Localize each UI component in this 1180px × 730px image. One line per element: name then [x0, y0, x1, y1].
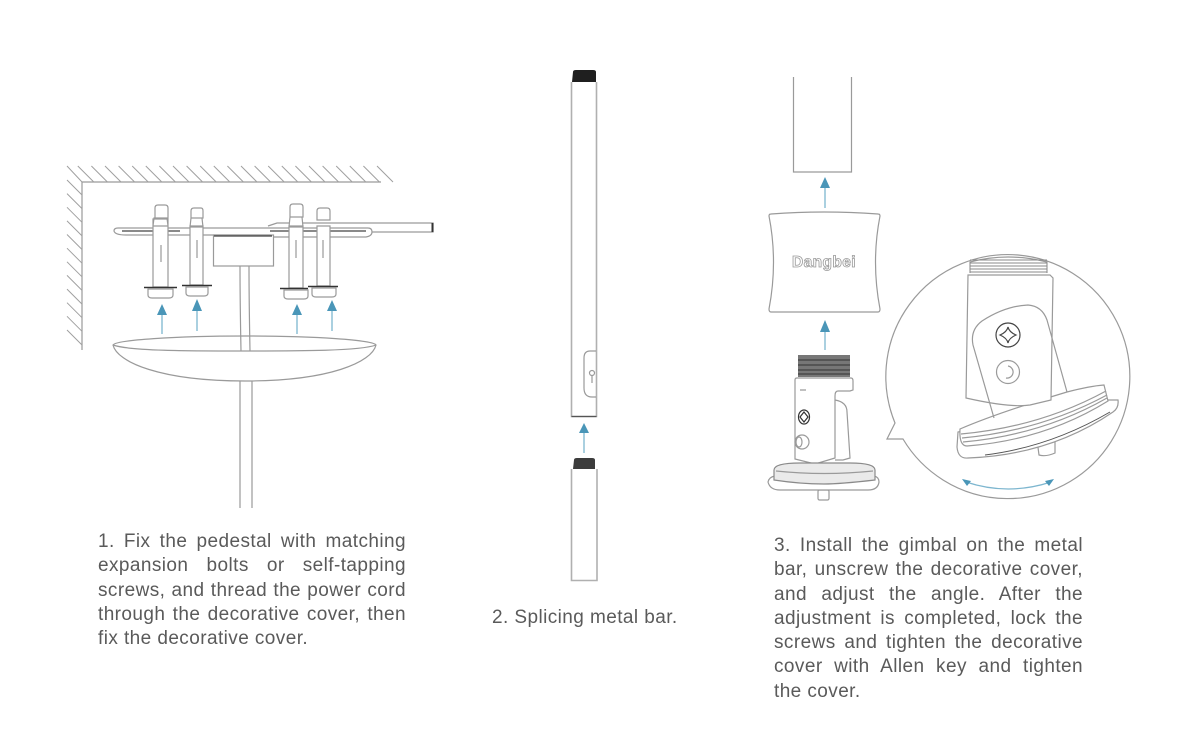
magnified callout circle [886, 255, 1130, 499]
text: step 1 instructions: screws, and thread the power cord [98, 580, 406, 601]
pedestal rod [268, 223, 433, 232]
text: step 1 instructions: fix the decorative cover. [98, 628, 308, 649]
keyhole slot [584, 351, 596, 397]
upper bar [572, 82, 596, 416]
bolt 3 [280, 204, 308, 299]
small hole [795, 435, 809, 449]
bolt 1 [144, 205, 177, 298]
text: step 3 instructions: adjustment is completed, lock the [774, 608, 1083, 629]
magnified tilted bracket [972, 305, 1067, 418]
lower bar [572, 469, 597, 580]
power cord [240, 266, 252, 508]
arrows up [157, 299, 337, 334]
text: step 2 instructions: 2. Splicing metal bar. [492, 607, 678, 628]
illustration: step 2 metal bars [572, 70, 597, 580]
magnified hole [996, 360, 1020, 384]
logo text: Dangbei [792, 254, 856, 271]
illustration: step 3 gimbal [768, 77, 1130, 500]
junction box [214, 235, 274, 266]
gimbal base [768, 463, 879, 500]
text: step 3 instructions: the cover. [774, 681, 861, 702]
illustration: step 1 ceiling mount [67, 166, 433, 508]
text: step 3 instructions: bar, unscrew the decorative cover, [774, 559, 1083, 580]
text: step 1 instructions [98, 531, 406, 649]
magnified body [966, 275, 1053, 406]
lower bar cap [573, 458, 595, 469]
bracket [800, 390, 850, 460]
bolt 4 [308, 208, 338, 297]
magnified thread [970, 257, 1047, 273]
bolt 2 [182, 208, 212, 296]
decorative cover [769, 212, 880, 312]
text: step 3 instructions: cover with Allen key and tighten [774, 656, 1083, 677]
arrow: gimbal to cover [820, 320, 830, 350]
magnified screw [996, 323, 1020, 347]
text: step 1 instructions: 1. Fix the pedestal with matching [98, 531, 406, 552]
pedestal plate [114, 228, 372, 237]
text: step 3 instructions: screws and tighten the decorative [774, 632, 1083, 653]
magnified tilted base [957, 385, 1118, 458]
text: step 3 instructions: 3. Install the gimbal on the metal [774, 535, 1083, 556]
tube [794, 77, 852, 172]
arrow: tube to cover [820, 177, 830, 208]
rotation arrow [962, 479, 1054, 489]
text: step 1 instructions: through the decorative cover, then [98, 604, 406, 625]
decorative cover dish [113, 336, 376, 381]
text: step 3 instructions [774, 535, 1083, 702]
ceiling and wall hatching [67, 166, 393, 350]
black threaded cap [572, 70, 596, 82]
arrow up [579, 423, 589, 453]
small screw [798, 410, 810, 424]
gimbal thread [798, 355, 850, 377]
text: step 3 instructions: and adjust the angle. After the [774, 584, 1083, 605]
text: step 1 instructions: expansion bolts or self-tapping [98, 555, 406, 576]
gimbal body [795, 378, 853, 464]
